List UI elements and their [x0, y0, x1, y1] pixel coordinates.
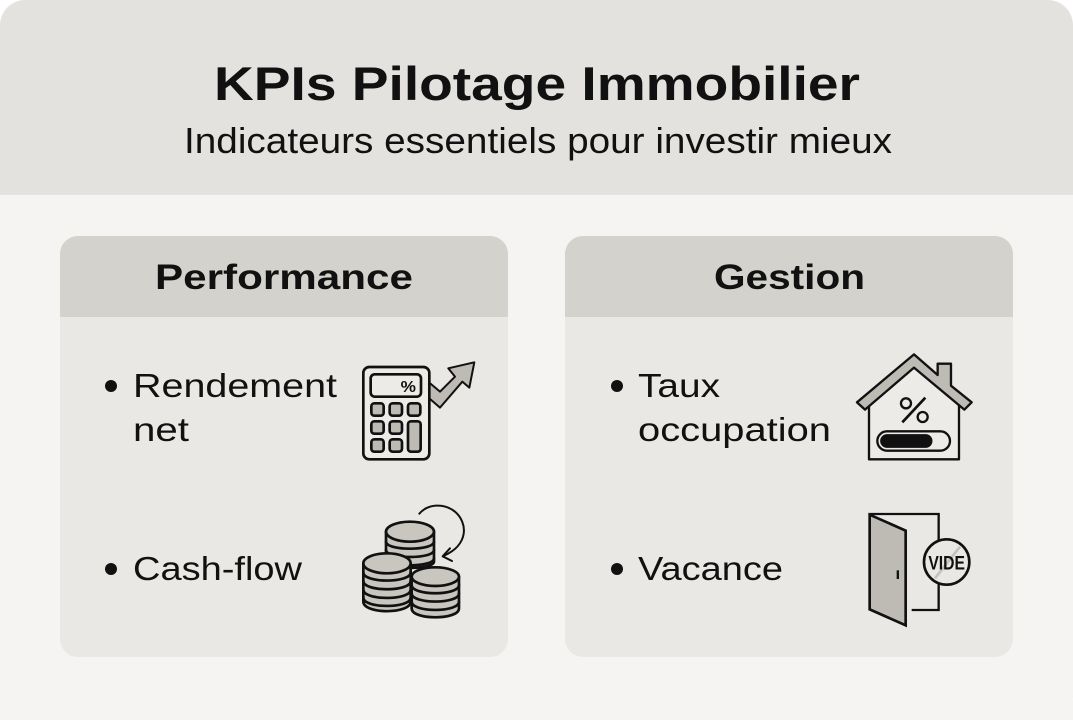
icon: coin stacks with cycle arrow — [363, 506, 464, 617]
panel header: performance — [60, 236, 508, 317]
heading: gestion: Gestion — [714, 258, 865, 297]
icon: open door with vide stamp — [870, 514, 969, 625]
panel: gestion — [565, 236, 1013, 657]
bullet: vacance: Vacance — [638, 550, 783, 587]
bullet: taux occupation: Taux — [638, 367, 721, 404]
heading: performance: Performance — [155, 258, 413, 297]
panel: performance — [60, 236, 508, 657]
bullet: taux occupation — [611, 367, 831, 448]
header band — [0, 0, 1073, 195]
title: KPIs Pilotage Immobilier — [214, 57, 860, 110]
icon: calculator with rising arrow — [363, 362, 474, 459]
bullet: cash-flow: Cash-flow — [133, 550, 302, 587]
bullet: rendement net — [105, 367, 337, 448]
icon: house with percent and gauge — [857, 354, 972, 459]
icon: open door with vide stamp: VIDE — [928, 553, 965, 574]
bullet: taux occupation: occupation — [638, 411, 831, 448]
bullet: rendement net: net — [133, 411, 189, 448]
bullet: rendement net: Rendement — [133, 367, 337, 404]
subtitle: Indicateurs essentiels pour investir mieux — [184, 120, 892, 161]
icon: calculator with rising arrow: % — [401, 379, 416, 396]
panel header: gestion — [565, 236, 1013, 317]
